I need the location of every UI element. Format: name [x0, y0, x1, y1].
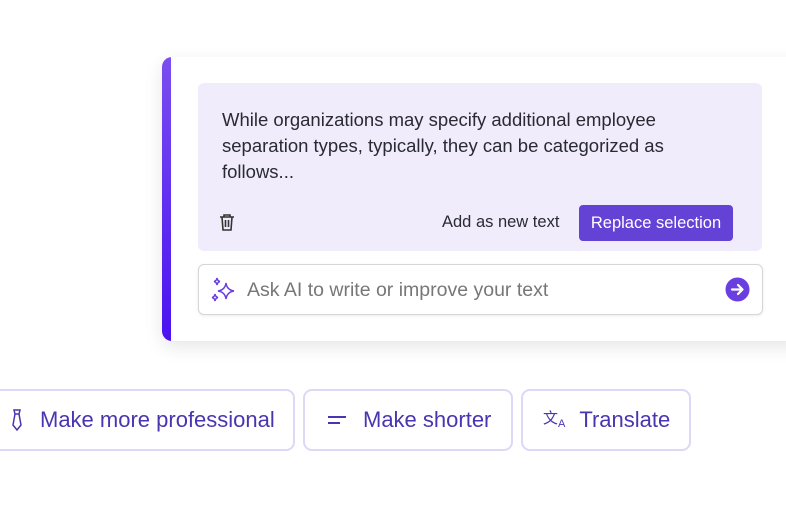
icon: sparkle: [212, 278, 234, 302]
text block: suggestion: While organizations may specify additional employee separation types, typically, they can be categorized as follows...: [222, 109, 664, 182]
panel: suggestion box: [198, 83, 762, 251]
placeholder text: Ask AI to write or improve your text: [247, 279, 548, 301]
button: translate: 文A: [543, 410, 565, 430]
button: translate: [521, 389, 691, 451]
button: make more professional: [0, 389, 295, 451]
icon: send arrow: [726, 278, 750, 302]
accent bar: [162, 57, 171, 341]
button: replace selection: [579, 205, 733, 241]
button: make more professional: Make more professional: [40, 407, 275, 432]
panel: AI assistant card: [162, 57, 786, 341]
button: make shorter: [303, 389, 513, 451]
button: translate: Translate: [579, 407, 670, 432]
icon: trash: [220, 214, 234, 231]
input: ask AI: [198, 264, 763, 315]
text: add as new text: Add as new text: [442, 213, 559, 231]
button: make shorter: Make shorter: [363, 407, 491, 432]
button: replace selection: Replace selection: [591, 214, 721, 232]
